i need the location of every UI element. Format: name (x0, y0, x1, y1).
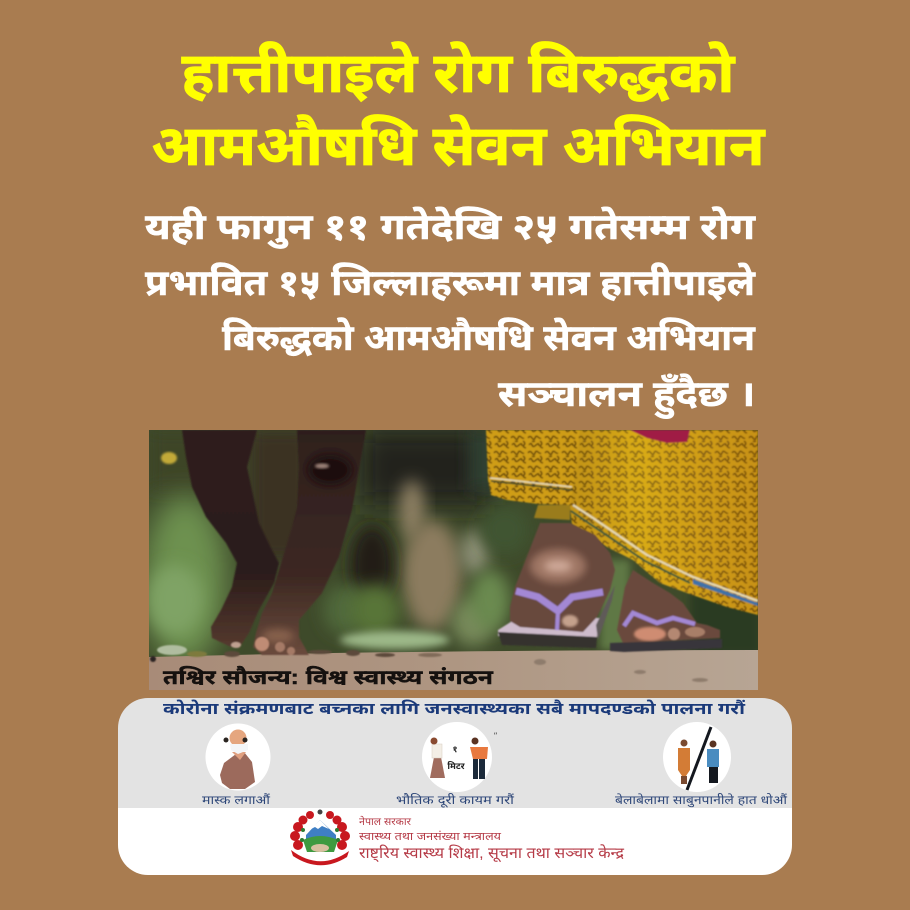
swollen foot and sandal (498, 523, 615, 648)
logo: Nepal emblem (290, 810, 350, 865)
intro text block: सञ्चालन हुँदैछ । (498, 372, 755, 419)
child legs (182, 430, 366, 655)
photo credit: तश्विर सौजन्य: विश्व स्वास्थ्य संगठन (163, 665, 494, 689)
photo (143, 430, 760, 690)
ministry text (359, 816, 625, 863)
banner heading: कोरोना संक्रमणबाट बच्नका लागि जनस्वास्थ्यका सबै मापदण्डको पालना गरौं (163, 699, 746, 718)
health notice banner (118, 698, 792, 875)
ground (149, 650, 758, 690)
title: आमऔषधि सेवन अभियान (152, 114, 766, 177)
icon: mask (206, 724, 270, 790)
intro text block: प्रभावित १५ जिल्लाहरूमा मात्र हात्तीपाइले (145, 261, 757, 303)
icon: distance: " (493, 731, 497, 741)
ministry text: स्वास्थ्य तथा जनसंख्या मन्त्रालय (359, 830, 502, 843)
ministry text: राष्ट्रिय स्वास्थ्य शिक्षा, सूचना तथा सञ्चार केन्द्र (359, 844, 625, 863)
intro text block: यही फागुन ११ गतेदेखि २५ गतेसम्म रोग (145, 205, 756, 249)
title (152, 41, 766, 177)
icon: distance: १ (452, 744, 458, 754)
intro text block: बिरुद्धको आमऔषधि सेवन अभियान (222, 316, 756, 358)
photo background foliage (143, 430, 760, 665)
title: हात्तीपाइले रोग बिरुद्धको (182, 41, 736, 104)
icon: handwash (663, 722, 731, 792)
intro text block (145, 205, 757, 419)
ministry text: नेपाल सरकार (359, 816, 412, 828)
icon: distance (422, 722, 497, 792)
skirt (486, 430, 758, 615)
right foot and sandal (610, 570, 722, 652)
label: distance: भौतिक दूरी कायम गरौं (396, 792, 515, 808)
label: mask: मास्क लगाऔं (202, 793, 271, 807)
label: handwash: बेलाबेलामा साबुनपानीले हात धोऔं (615, 792, 788, 808)
icon: distance: मिटर (447, 760, 466, 771)
